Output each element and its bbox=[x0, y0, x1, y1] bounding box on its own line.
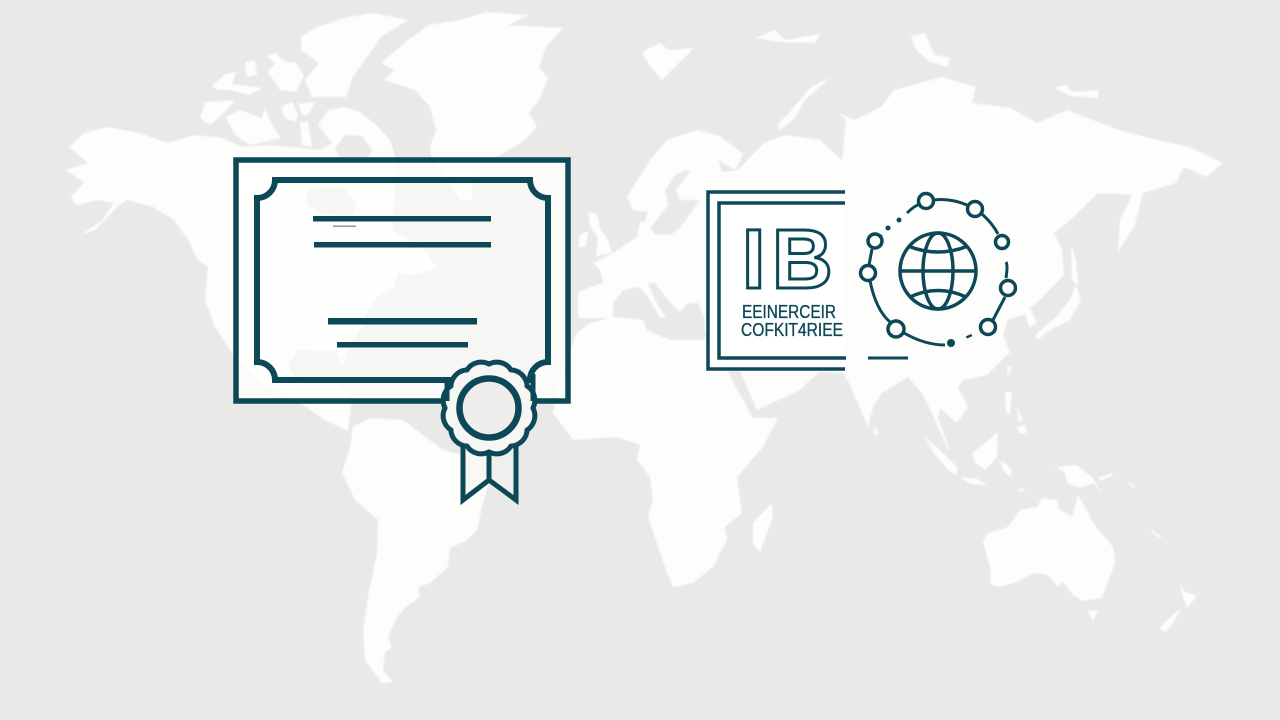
orbit arcs bbox=[869, 200, 1007, 345]
certificate text lines bbox=[313, 216, 491, 348]
Africa bbox=[553, 317, 778, 587]
panel background bbox=[707, 190, 845, 371]
globe network icon bbox=[860, 194, 1016, 347]
panel caption line two: COFKIT4RIEE bbox=[741, 320, 843, 340]
certificate inner frame bbox=[257, 180, 548, 380]
globe bbox=[900, 233, 976, 309]
orbit dots bbox=[880, 218, 972, 347]
Hudson Bay bbox=[307, 135, 372, 217]
orbit nodes bbox=[860, 194, 1016, 337]
Mediterranean Sea bbox=[613, 283, 705, 345]
IB certification panel bbox=[707, 190, 908, 371]
ribbon tails bbox=[463, 445, 516, 500]
certificate paper bbox=[236, 160, 568, 401]
certificate icon bbox=[236, 160, 568, 500]
islands bbox=[578, 30, 1197, 633]
panel caption line one: EEINERCEIR bbox=[742, 302, 836, 322]
Eurasia bbox=[578, 77, 1223, 450]
certificate inner area bbox=[257, 180, 548, 380]
short rule bbox=[868, 356, 908, 360]
rosette seal bbox=[443, 362, 535, 454]
Baltic Sea bbox=[650, 170, 700, 235]
Madagascar bbox=[753, 503, 773, 552]
South America bbox=[342, 418, 490, 683]
North America bbox=[65, 12, 563, 431]
certificate outer frame bbox=[236, 160, 568, 401]
double bracket frame bbox=[708, 192, 846, 369]
frame joins at seal bbox=[447, 374, 533, 401]
IB letters: IB bbox=[742, 212, 833, 306]
